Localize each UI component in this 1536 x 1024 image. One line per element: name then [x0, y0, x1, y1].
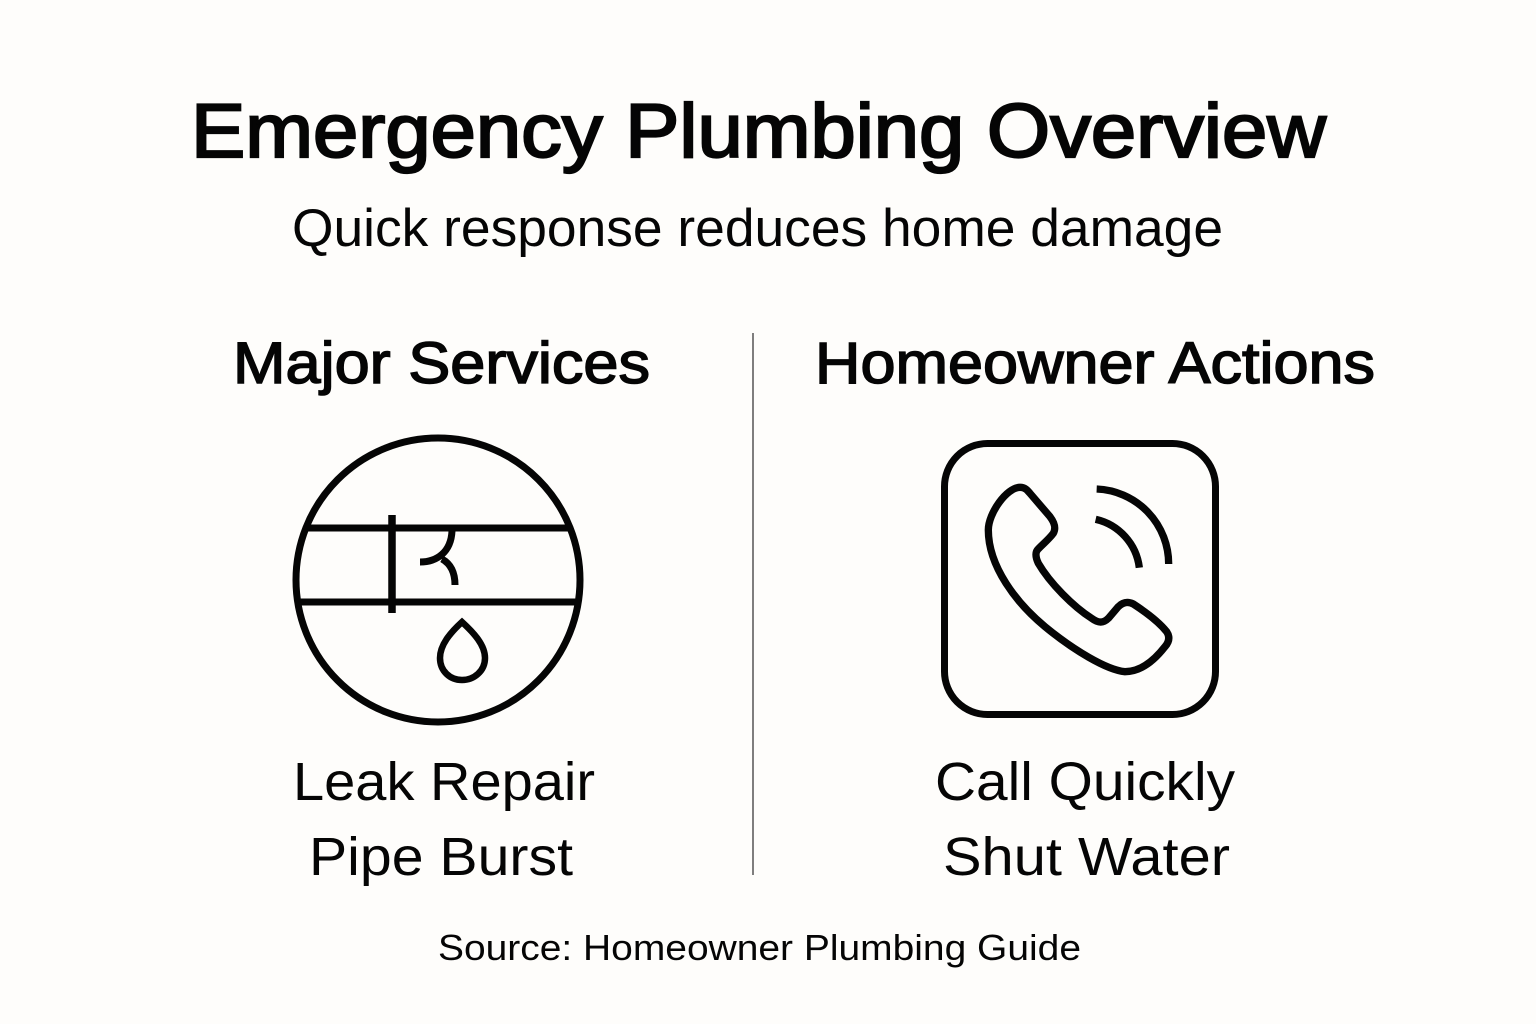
icon: leaking pipe [296, 438, 580, 722]
label: pipe burst: Pipe Burst [309, 827, 573, 887]
icon: phone call [944, 444, 1216, 714]
label: leak repair: Leak Repair [293, 752, 595, 812]
panel: homeowner actions [815, 331, 1375, 887]
title: Emergency Plumbing Overview [191, 89, 1327, 174]
source note: Source: Homeowner Plumbing Guide [438, 927, 1081, 968]
panel: major services [233, 331, 650, 887]
label: call quickly: Call Quickly [935, 752, 1235, 812]
label: shut water: Shut Water [943, 827, 1230, 887]
subtitle: Quick response reduces home damage [292, 199, 1223, 258]
heading: major services: Major Services [233, 331, 650, 396]
divider [752, 333, 754, 875]
heading: homeowner actions: Homeowner Actions [815, 331, 1375, 396]
